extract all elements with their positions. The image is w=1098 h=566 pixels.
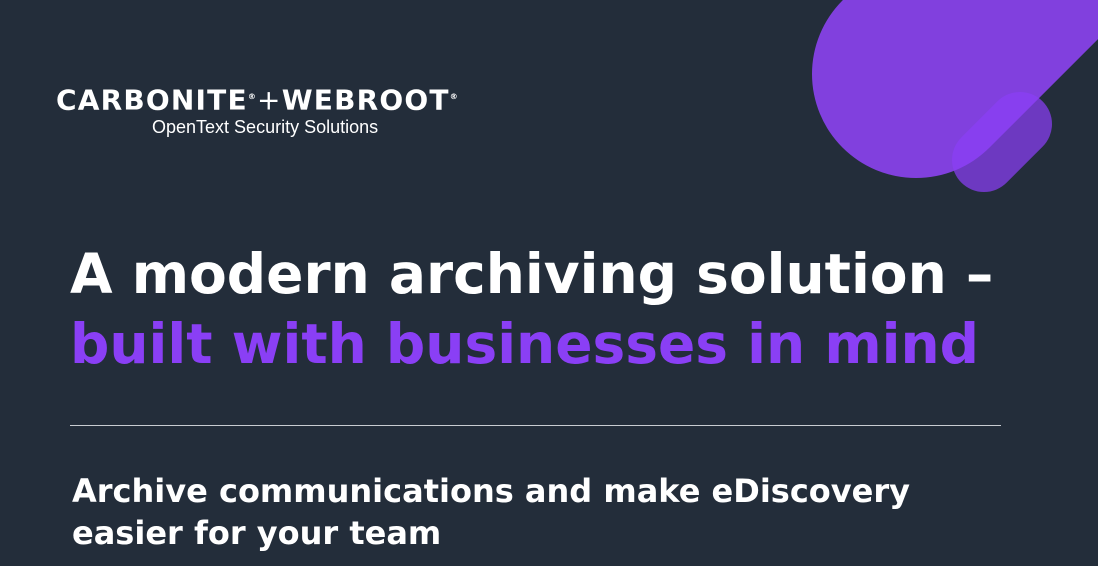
subtitle xyxy=(72,472,910,552)
subtitle: easier for your team xyxy=(72,514,441,552)
title xyxy=(70,242,993,376)
title: built with businesses in mind xyxy=(70,312,979,376)
title: A modern archiving solution – xyxy=(70,242,993,306)
logo xyxy=(56,83,459,137)
logo: CARBONITE®+WEBROOT® xyxy=(56,83,459,116)
logo: OpenText Security Solutions xyxy=(152,117,378,137)
subtitle: Archive communications and make eDiscovery xyxy=(72,472,910,510)
